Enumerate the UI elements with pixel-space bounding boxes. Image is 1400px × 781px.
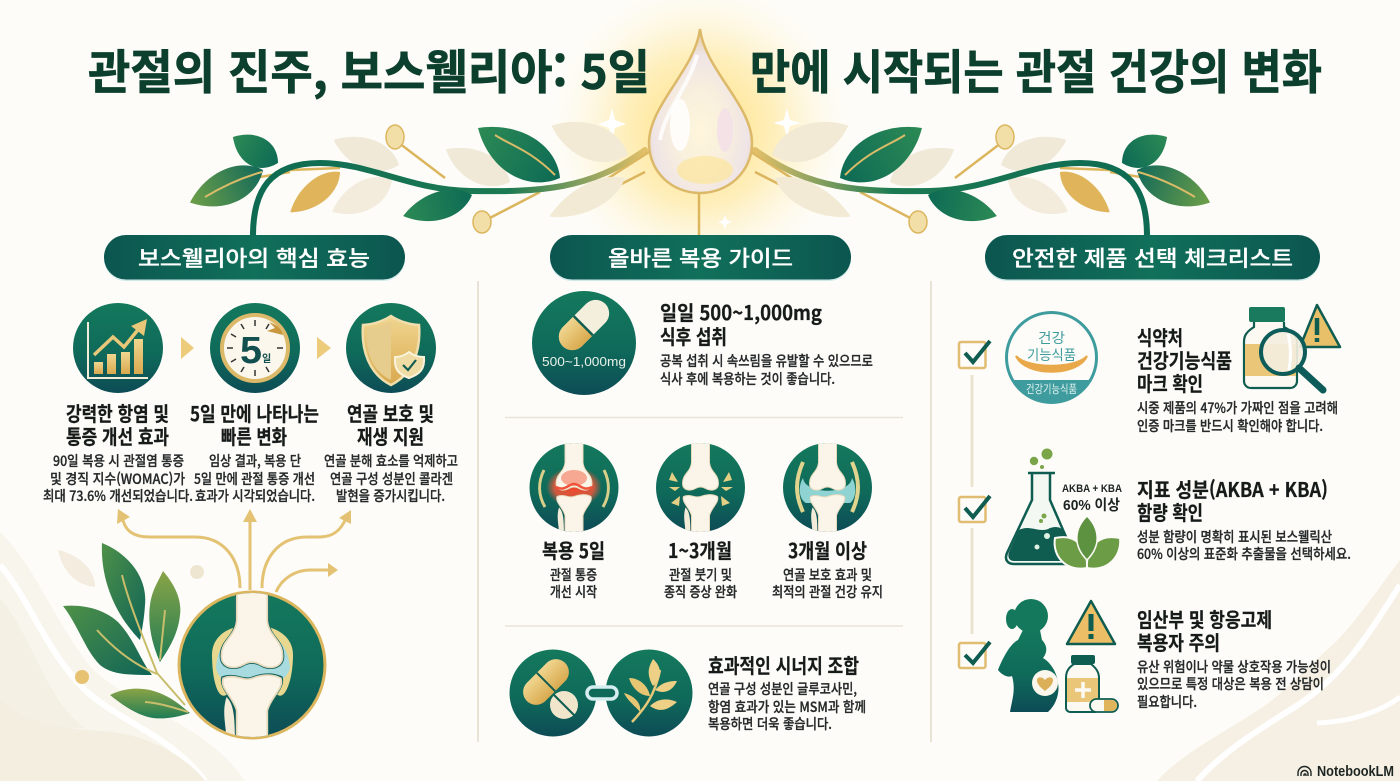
text: dosage (660, 297, 873, 389)
text: 1-3 months: 관절 붓기 및 (669, 565, 732, 585)
text: efficacy 3: 연골 구성 성분인 콜라겐 (330, 469, 453, 489)
text: 5 days: 관절 통증 (550, 565, 597, 585)
text: marker compound: 60% 이상의 표준화 추출물을 선택하세요. (1137, 544, 1351, 564)
text: marker compound: 지표 성분(AKBA + KBA) (1137, 474, 1328, 503)
heading banner: dosage guide: 올바른 복용 가이드 (608, 242, 793, 273)
title: 관절의 진주, 보스웰리아: 5일 (88, 34, 650, 103)
text: efficacy 3 (324, 398, 458, 506)
text: 5 days: 복용 5일 (542, 535, 605, 564)
icon: health functional food badge: 건강기능식품 (1026, 381, 1077, 397)
icon: checkbox 3 (959, 642, 990, 668)
text: synergy: 연골 구성 성분인 글루코사민, (708, 679, 857, 699)
text: efficacy 3: 발현을 증가시킵니다. (336, 486, 445, 506)
icon: bottle, magnifier, warning (1244, 305, 1340, 390)
text: mark check: 건강기능식품 (1137, 345, 1232, 374)
icon: shield (346, 303, 436, 393)
text: efficacy 1 (43, 398, 193, 506)
icon: 5-day clock (210, 303, 300, 393)
text: efficacy 3: 연골 분해 효소를 억제하고 (324, 451, 458, 471)
text: efficacy 1: 90일 복용 시 관절염 통증 (53, 451, 184, 471)
text: 3+ months (772, 535, 883, 602)
timeline line (970, 375, 974, 634)
vine right (748, 110, 1217, 236)
leaves (63, 606, 152, 675)
icon: flask and plant: 60% 이상 (1063, 497, 1120, 514)
text: efficacy 2 (190, 398, 319, 506)
illustration: knee with leaves (58, 509, 351, 745)
text: efficacy 3: 재생 지원 (357, 421, 424, 450)
arrow (181, 337, 194, 359)
text: mark check: 식약처 (1137, 322, 1183, 351)
text: marker compound: 함량 확인 (1137, 497, 1203, 526)
icon: synergy pills and plant (510, 650, 692, 736)
text: 1-3 months (664, 535, 737, 602)
arrow (317, 337, 331, 359)
text: precautions: 임산부 및 항응고제 (1137, 604, 1272, 633)
bottom-left wave decoration (0, 532, 245, 781)
text: precautions: 필요합니다. (1137, 692, 1197, 712)
icon: medicine bottle and pill (1066, 655, 1118, 712)
bottom-right wave decoration (1157, 560, 1400, 781)
text: 3+ months: 연골 보호 효과 및 (783, 565, 872, 585)
icon: pearl drop (649, 29, 752, 193)
text: dosage: 공복 섭취 시 속쓰림을 유발할 수 있으므로 (660, 351, 873, 371)
text: dosage: 식사 후에 복용하는 것이 좋습니다. (660, 369, 835, 389)
icon: checkbox 1 (959, 341, 990, 368)
panel: dosage guide (510, 291, 883, 736)
icon: swelling relief joint (656, 440, 745, 536)
text: precautions: 있으므로 특정 대상은 복용 전 상담이 (1137, 674, 1324, 694)
text: efficacy 1: 최대 73.6% 개선되었습니다. (43, 486, 193, 506)
text: 1-3 months: 1~3개월 (668, 535, 732, 564)
text: efficacy 1: 강력한 항염 및 (66, 398, 169, 427)
icon: health functional food badge (1005, 312, 1098, 406)
text: efficacy 2: 효과가 시각되었습니다. (195, 486, 315, 506)
title: 만에 시작되는 관절 건강의 변화 (750, 34, 1322, 103)
text: 5 days (542, 535, 605, 602)
icon: flask and plant: AKBA + KBA (1062, 483, 1122, 495)
text: precautions: 복용자 주의 (1137, 627, 1220, 656)
title (88, 34, 1322, 103)
icon: healthy joint (783, 440, 872, 536)
heading banner: checklist: 안전한 제품 선택 체크리스트 (1012, 242, 1293, 273)
panel: checklist (959, 305, 1351, 712)
text: efficacy 1: 통증 개선 효과 (66, 421, 169, 450)
text: efficacy 1: 및 경직 지수(WOMAC)가 (50, 469, 185, 489)
text: synergy: 효과적인 시너지 조합 (708, 650, 859, 679)
vine left (183, 110, 652, 236)
text: precautions: 유산 위험이나 약물 상호작용 가능성이 (1137, 657, 1331, 677)
text: dosage: 일일 500~1,000mg (660, 297, 822, 326)
text: marker compound: 성분 함량이 명확히 표시된 보스웰릭산 (1137, 527, 1332, 547)
text: efficacy 2: 임상 결과, 복용 단 (209, 451, 301, 471)
icon: 5-day clock: 5 (240, 330, 262, 372)
text: synergy: 항염 효과가 있는 MSM과 함께 (708, 697, 866, 717)
text: mark check: 인증 마크를 반드시 확인해야 합니다. (1137, 416, 1323, 436)
text: mark check: 마크 확인 (1137, 368, 1203, 397)
heading banner: checklist (985, 235, 1320, 281)
icon: capsule: 500~1,000mg (542, 354, 626, 369)
text: precautions (1137, 604, 1331, 712)
text: efficacy 2: 빠른 변화 (221, 421, 287, 450)
connector from drop to centre banner (698, 192, 700, 237)
text: marker compound (1137, 474, 1351, 564)
icon: warning triangle (1067, 601, 1115, 644)
text: 3+ months: 최적의 관절 건강 유지 (772, 582, 883, 602)
text: 5 days: 개선 시작 (550, 582, 597, 602)
text: dosage: 식후 섭취 (660, 321, 727, 350)
text: mark check (1137, 322, 1338, 436)
text: synergy (708, 650, 866, 734)
heading banner: core efficacy (104, 235, 405, 281)
panel: core efficacy (43, 303, 458, 506)
icon: pregnant woman (998, 599, 1059, 712)
heading banner: core efficacy: 보스웰리아의 핵심 효능 (138, 242, 370, 273)
text: efficacy 2: 5일 만에 나타나는 (190, 398, 319, 427)
dividers (478, 281, 931, 742)
icon: health functional food badge: 건강 (1038, 328, 1065, 348)
text: efficacy 2: 5일 만에 관절 통증 개선 (194, 469, 315, 489)
icon: health functional food badge: 기능식품 (1027, 345, 1076, 365)
arrows from knee (122, 516, 346, 592)
icon: 5-day clock: 일 (262, 350, 271, 365)
icon: inflamed joint (530, 440, 618, 536)
text: synergy: 복용하면 더욱 좋습니다. (708, 714, 832, 734)
icon: flask and plant (1006, 448, 1122, 569)
icon: checkbox 2 (959, 496, 990, 522)
text: efficacy 3: 연골 보호 및 (347, 398, 434, 427)
icon: rising chart (73, 303, 163, 393)
central glow (550, 0, 850, 280)
icon: capsule (532, 291, 636, 395)
heading banner: dosage guide (550, 235, 851, 281)
text: 3+ months: 3개월 이상 (788, 535, 867, 564)
text: 1-3 months: 종직 증상 완화 (664, 582, 737, 602)
knee circle (179, 592, 325, 738)
text: mark check: 시중 제품의 47%가 가짜인 점을 고려해 (1137, 398, 1338, 418)
